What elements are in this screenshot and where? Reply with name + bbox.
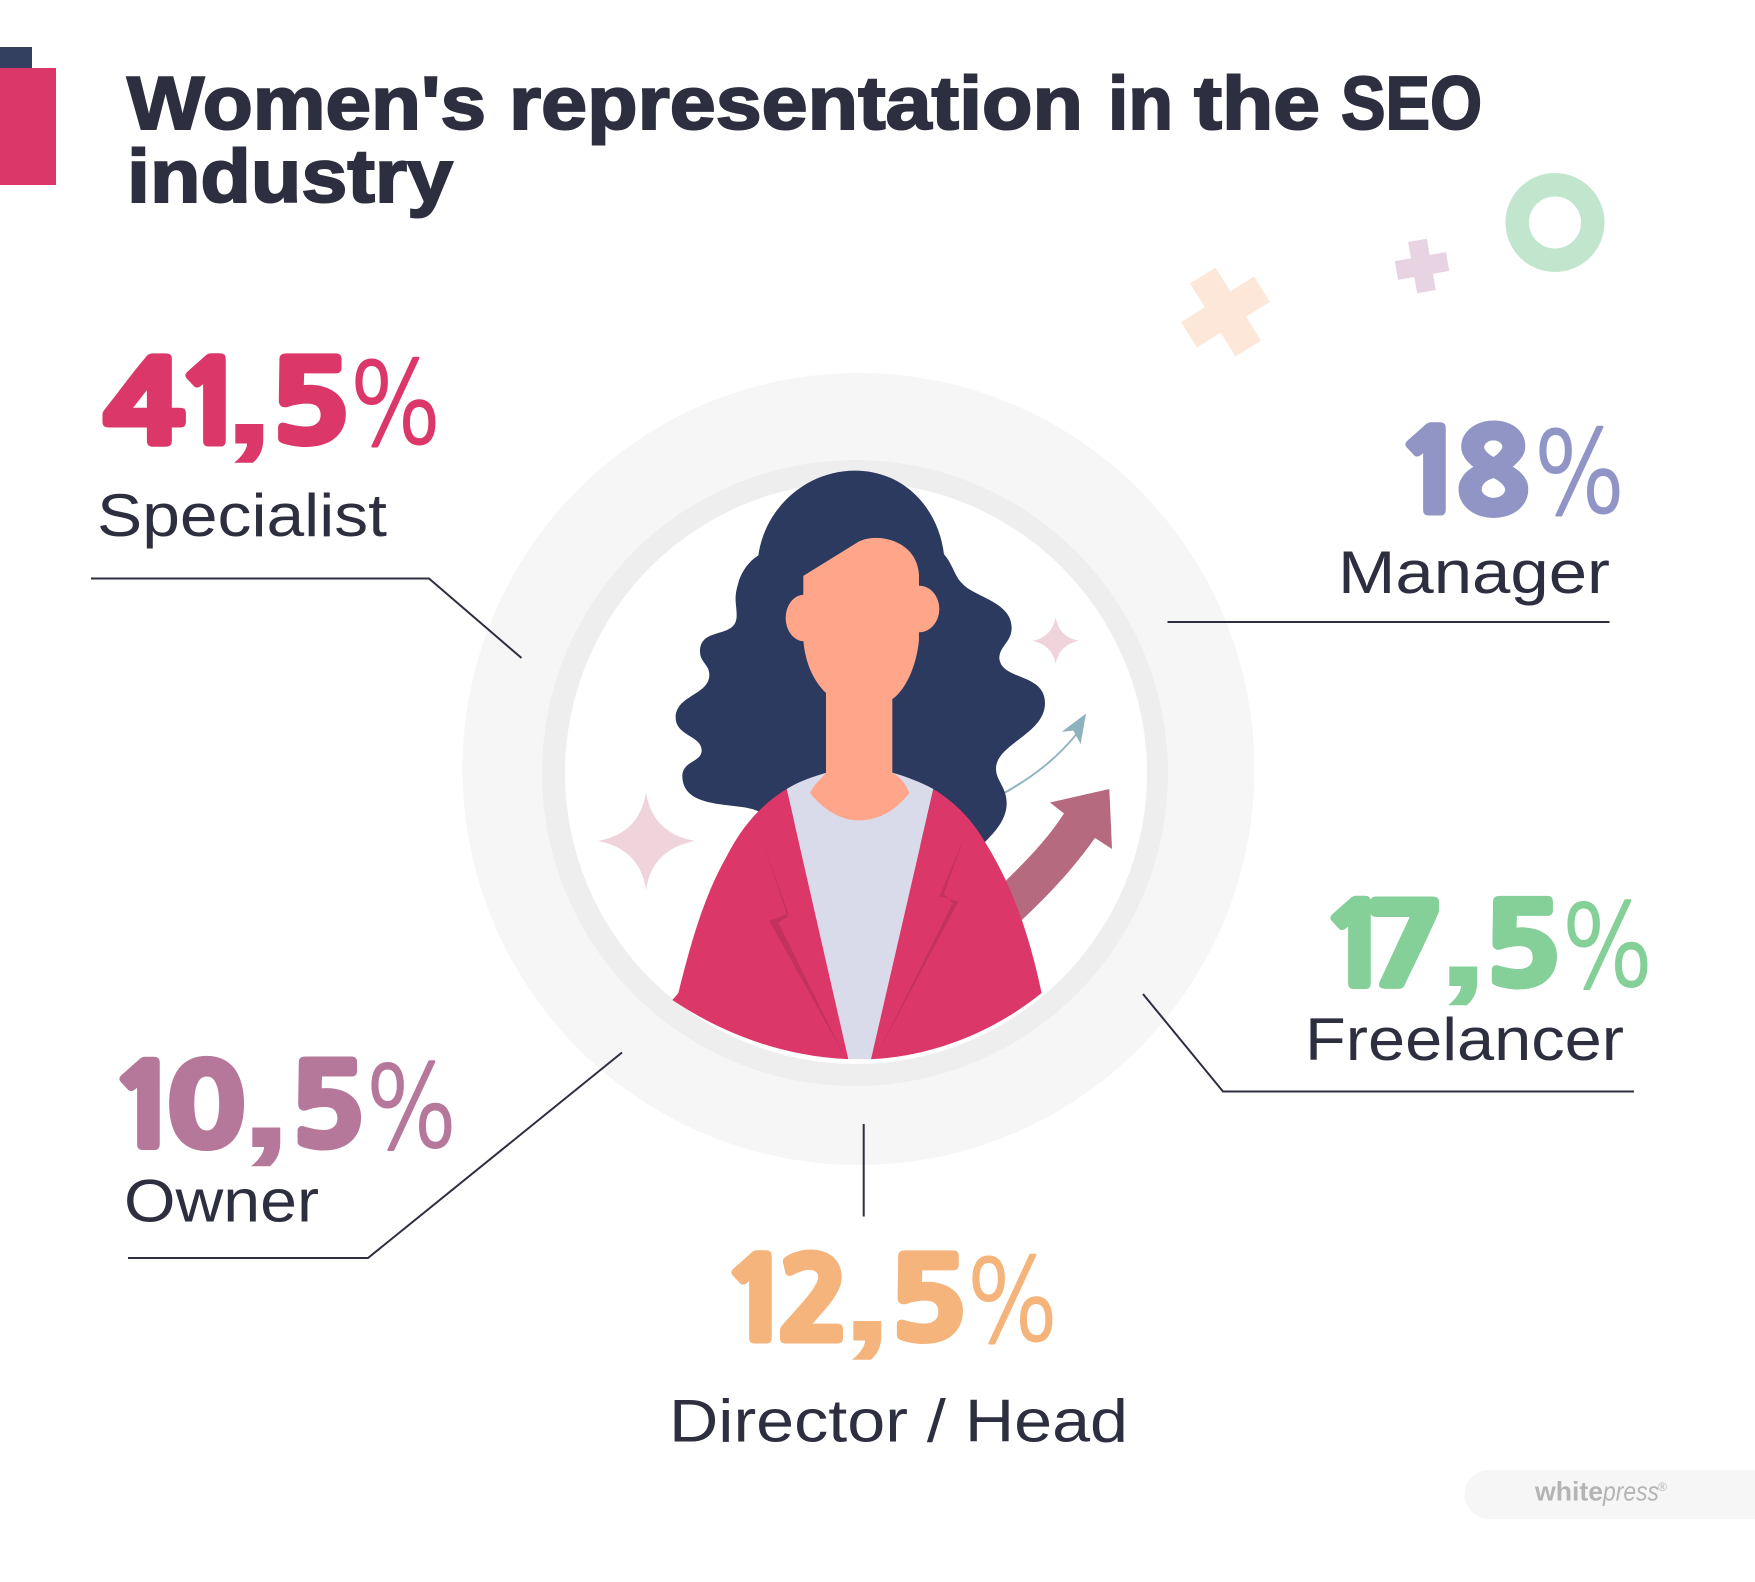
title: Women's bbox=[127, 61, 486, 145]
logo: whitepress badge: white bbox=[1534, 1476, 1603, 1506]
value 18%: 8 bbox=[1457, 417, 1529, 529]
leader line Freelancer bbox=[1143, 994, 1634, 1092]
stat: Owner bbox=[110, 1036, 622, 1258]
leader line Specialist bbox=[91, 578, 522, 658]
value 10,5%: 1 bbox=[110, 1052, 182, 1164]
illustration: woman with growth arrows bbox=[672, 471, 1112, 1059]
arrow: thin teal arrow bbox=[1003, 713, 1086, 793]
stat: Freelancer bbox=[1143, 874, 1659, 1092]
icon: right sparkle bbox=[1032, 617, 1079, 664]
value 17,5%: 7 bbox=[1366, 890, 1445, 1002]
decoration: orange cross bbox=[1166, 253, 1285, 371]
shirt bbox=[787, 773, 933, 1059]
stat: Manager bbox=[1168, 417, 1631, 622]
value 18%: % bbox=[1528, 417, 1631, 531]
label Specialist: Specialist bbox=[97, 482, 387, 549]
title: the bbox=[1194, 61, 1320, 145]
title: representation bbox=[509, 61, 1083, 145]
title: SEO bbox=[1341, 61, 1482, 145]
value 12,5%: 5 bbox=[888, 1245, 967, 1357]
value 12,5%: 1 bbox=[722, 1245, 794, 1357]
value 10,5% bbox=[110, 1036, 463, 1174]
value 12,5%: , bbox=[841, 1229, 893, 1367]
jacket lapels bbox=[763, 838, 964, 1054]
leader line Director bbox=[863, 1124, 865, 1216]
value 17,5%: , bbox=[1437, 874, 1489, 1012]
value 12,5%: 2 bbox=[777, 1245, 850, 1357]
title: industry bbox=[127, 134, 453, 218]
stat: Specialist bbox=[91, 332, 522, 658]
value 17,5%: 5 bbox=[1483, 890, 1561, 1002]
jacket bbox=[672, 789, 1042, 1059]
value 18%: 1 bbox=[1396, 417, 1468, 529]
value 41,5% bbox=[103, 332, 447, 470]
decoration: pink cross bbox=[1392, 236, 1452, 296]
value 10,5%: 0 bbox=[165, 1052, 245, 1164]
label Freelancer: Freelancer bbox=[1305, 1006, 1624, 1073]
title bbox=[127, 61, 1482, 218]
leader line Owner bbox=[128, 1052, 622, 1258]
value 18% bbox=[1396, 417, 1631, 531]
value 41,5%: 5 bbox=[269, 348, 350, 460]
value 17,5% bbox=[1321, 874, 1659, 1012]
corner accent blocks bbox=[0, 47, 56, 185]
label Director / Head: Director / Head bbox=[669, 1388, 1128, 1454]
value 41,5%: 4 bbox=[103, 348, 185, 460]
value 41,5%: , bbox=[223, 332, 275, 470]
stat: Director / Head bbox=[669, 1124, 1128, 1454]
value 41,5%: % bbox=[344, 348, 447, 462]
value 17,5%: 1 bbox=[1321, 890, 1393, 1002]
value 12,5% bbox=[722, 1229, 1064, 1367]
logo: whitepress badge bbox=[1464, 1470, 1755, 1519]
value 10,5%: 5 bbox=[289, 1052, 365, 1164]
value 10,5%: , bbox=[240, 1036, 292, 1174]
leader line Manager bbox=[1168, 621, 1610, 623]
title: in bbox=[1108, 61, 1173, 145]
logo: whitepress badge: ® bbox=[1658, 1480, 1667, 1494]
circle backdrop bbox=[462, 373, 1254, 1165]
arrow: large growth arrow bbox=[1003, 789, 1112, 922]
hair bbox=[676, 471, 1045, 848]
value 12,5%: % bbox=[961, 1245, 1064, 1359]
head and neck bbox=[786, 538, 939, 820]
value 17,5%: % bbox=[1556, 890, 1659, 1004]
icon: left sparkle bbox=[598, 792, 695, 890]
logo: whitepress badge: press bbox=[1602, 1476, 1659, 1506]
label Manager: Manager bbox=[1338, 539, 1610, 606]
label Owner: Owner bbox=[124, 1168, 319, 1234]
value 41,5%: 1 bbox=[176, 348, 248, 460]
value 10,5%: % bbox=[360, 1052, 463, 1166]
decoration: green ring bbox=[1517, 185, 1593, 260]
